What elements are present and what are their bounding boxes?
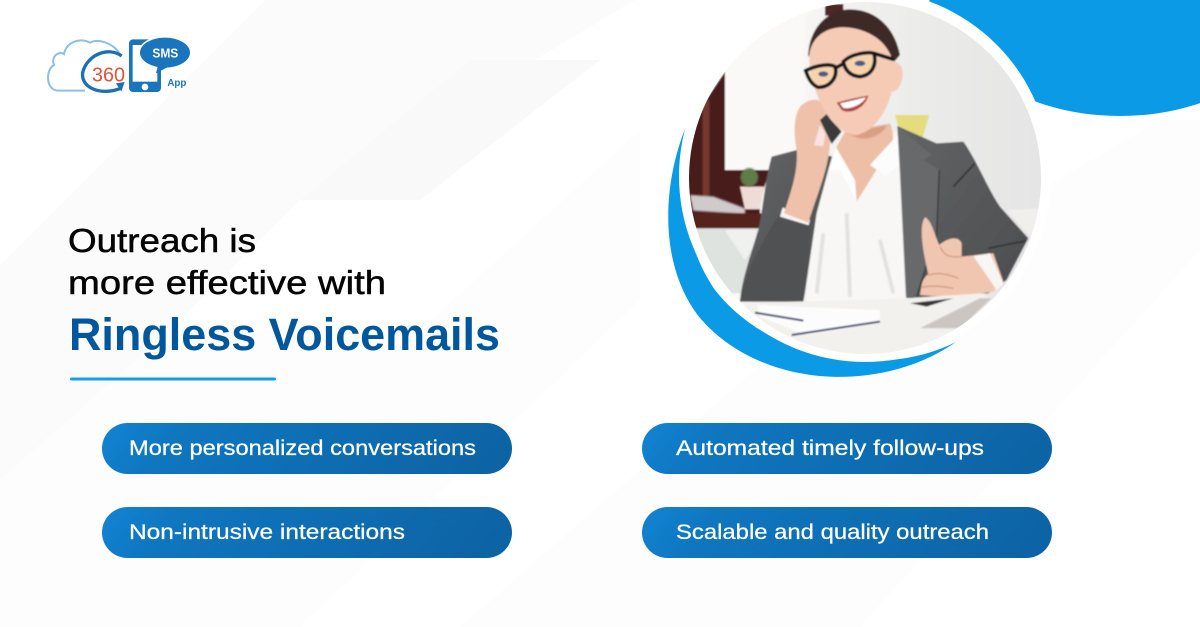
chair	[725, 230, 757, 260]
pill: non-intrusive interactions	[102, 507, 512, 558]
tablet	[910, 298, 953, 307]
phone glare	[814, 125, 825, 146]
right cuff	[973, 253, 1003, 290]
yellow cushion	[895, 115, 929, 141]
gesturing hand	[920, 217, 1003, 298]
decorative blue blob top right	[925, 0, 1200, 116]
blazer left body	[740, 150, 833, 302]
logo: 360 SMS App	[48, 36, 192, 92]
pill: non-intrusive interactions: Non-intrusive interactions	[129, 521, 405, 544]
shirt	[803, 130, 907, 304]
heading line 1: Outreach is	[68, 222, 256, 259]
photo: woman on the phone at a desk	[680, 0, 1050, 360]
shirt fold shading	[817, 213, 893, 297]
shirt collar left	[828, 148, 857, 202]
glasses	[806, 53, 893, 87]
lighter frame edge	[703, 100, 709, 200]
logo number 360: 360	[92, 64, 125, 87]
notebook lines	[755, 313, 880, 335]
heading line 2: more effective with	[68, 264, 386, 301]
heading	[68, 222, 500, 360]
icon: SMS speech bubble	[138, 36, 192, 73]
sleeve left arm	[740, 218, 790, 302]
icon: circular arrow	[83, 52, 122, 91]
face	[809, 27, 903, 135]
papers on sill	[690, 195, 745, 214]
pill: automated timely follow-ups	[642, 423, 1052, 474]
window frame	[683, 72, 770, 227]
clipboard	[920, 298, 992, 328]
cuff left	[780, 207, 810, 225]
phone	[820, 114, 842, 144]
blazer right body	[897, 126, 1028, 298]
icon: cloud	[48, 40, 119, 91]
sill	[693, 213, 762, 228]
lapel shadow	[917, 170, 939, 297]
right wall lower	[1009, 209, 1038, 236]
arrow head	[116, 82, 125, 91]
eyes	[818, 61, 865, 77]
icon: SMS speech bubble: SMS	[152, 45, 178, 60]
shirt collar right	[870, 140, 894, 170]
neck	[837, 123, 893, 202]
hair	[808, 9, 900, 67]
heading highlight: Ringless Voicemails	[69, 309, 500, 360]
pill: more personalized conversations: More personalized conversations	[129, 437, 476, 460]
teeth	[840, 97, 866, 108]
neck shadow	[847, 125, 887, 139]
logo word App: App	[167, 78, 186, 89]
plant pot	[740, 168, 764, 209]
notebook	[757, 305, 880, 335]
smile	[837, 96, 868, 112]
top frame fragment	[825, 4, 843, 16]
pill: scalable and quality outreach: Scalable and quality outreach	[676, 521, 989, 544]
pill: scalable and quality outreach	[642, 507, 1052, 558]
desk and papers	[746, 292, 992, 340]
white ring around photo	[679, 0, 1051, 362]
pill: automated timely follow-ups: Automated timely follow-ups	[676, 437, 984, 460]
lower wall and chair	[693, 228, 760, 293]
pill: more personalized conversations	[102, 423, 512, 474]
blue crescent around photo	[668, 113, 956, 377]
forearm and hand at phone	[784, 100, 830, 223]
icon: phone	[129, 39, 161, 92]
lapel	[897, 126, 939, 297]
window	[725, 0, 805, 170]
heading underline	[70, 378, 276, 380]
blazer dark seam	[953, 163, 1027, 248]
